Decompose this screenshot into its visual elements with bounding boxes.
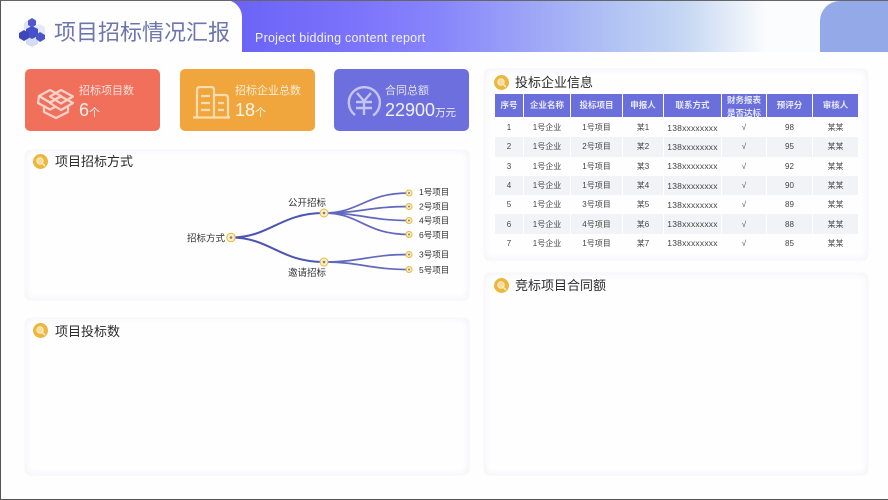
value: 22900万元 [385,100,456,120]
table: bidder information: 某某 [828,181,844,190]
table: bidder information: 138xxxxxxxx [667,200,718,210]
icon: yen coin [348,86,382,116]
heading: 项目招标方式 [55,154,133,169]
icon: buildings [193,86,230,119]
subtitle: Project bidding content report [255,31,426,45]
table: bidder information: √ [742,239,746,248]
table: bidder information: √ [742,220,746,229]
header right tab [820,1,888,52]
table: bidder information: 1号项目 [582,239,611,248]
table: bidder information: 1号项目 [582,123,611,132]
table: bidder information: 4 [507,181,511,190]
table: bidder information: 1号企业 [533,142,561,151]
stat card: projects [25,69,160,131]
table: bidder information: 某某 [828,200,844,209]
table: bidder information: √ [742,181,746,190]
table: bidder information: 某3 [637,162,649,171]
table: bidder information: 某某 [828,239,844,248]
mind map: bidding methods tree: 3号项目 [419,250,449,260]
mind map: bidding methods tree: 邀请招标 [288,267,327,279]
table: bidder information: 138xxxxxxxx [667,161,718,171]
table: bidder information: 1号项目 [582,181,611,190]
panel: bidding methods [25,150,469,300]
table: bidder information: 85 [785,239,794,248]
mind map: bidding methods tree: 招标方式 [187,232,226,244]
table: bidder information: 98 [785,123,794,132]
table: bidder information: 序号 [500,100,518,110]
table: bidder information: 1号企业 [533,181,561,190]
table: bidder information: 3 [507,162,511,171]
table: bidder information: 财务报表 [727,95,761,105]
table: bidder information: 1号企业 [533,239,561,248]
icon: magnifier [33,323,48,338]
table: bidder information: 138xxxxxxxx [667,238,718,248]
stat card: companies [180,69,315,131]
table: bidder information: 95 [785,142,794,151]
mind map: bidding methods tree: 6号项目 [419,230,449,240]
table: bidder information: 138xxxxxxxx [667,181,718,191]
table: bidder information: 4号项目 [582,220,611,229]
table: bidder information: 审核人 [823,100,848,110]
icon: cubes logo [19,18,45,47]
table: bidder information: 2号项目 [582,142,611,151]
mind map: bidding methods tree: 公开招标 [288,197,327,209]
title: 项目招标情况汇报 [54,20,230,45]
table: bidder information: 1号企业 [533,162,561,171]
table: bidder information: √ [742,123,746,132]
table: bidder information: 92 [785,162,794,171]
label: 招标项目数 [79,85,134,97]
table: bidder information: 6 [507,220,511,229]
table: bidder information: 某某 [828,142,844,151]
table: bidder information: 1号项目 [582,162,611,171]
table: bidder information: 预评分 [777,100,802,110]
mind map: bidding methods tree: 2号项目 [419,202,449,212]
table: bidder information: 5 [507,200,511,209]
header gradient band [227,1,827,52]
table: bidder information: 申报人 [630,100,656,110]
header white title tab [0,0,242,53]
table: bidder information: 某6 [637,220,649,229]
table: bidder information: √ [742,142,746,151]
mind map: bidding methods tree [187,187,449,279]
table: bidder information: √ [742,162,746,171]
table: bidder information: 某4 [637,181,649,190]
panel: contract amounts [484,273,868,475]
mind map: bidding methods tree: 1号项目 [419,187,449,197]
value: 6个 [79,100,100,120]
table: bidder information: 88 [785,220,794,229]
table: bidder information: 某5 [637,200,649,209]
table: bidder information [495,94,858,248]
table: bidder information: 某7 [637,239,649,248]
table: bidder information: 2 [507,142,511,151]
table: bidder information: 1号企业 [533,123,561,132]
panel: bidder information [484,69,868,260]
table: bidder information: 投标项目 [579,100,614,110]
table: bidder information: 某1 [637,123,649,132]
table: bidder information: 1号企业 [533,200,561,209]
table: bidder information: 3号项目 [582,200,611,209]
table: bidder information: 89 [785,200,794,209]
table: bidder information: 138xxxxxxxx [667,123,718,133]
table: bidder information: 7 [507,239,511,248]
table: bidder information: 90 [785,181,794,190]
stat card: contract total [334,69,469,131]
label: 招标企业总数 [235,85,301,97]
panel: bid counts [25,318,469,475]
table: bidder information: 1号企业 [533,220,561,229]
table: bidder information: 企业名称 [530,100,564,110]
icon: stacked boxes [37,88,74,119]
mind map: bidding methods tree: 4号项目 [419,216,449,226]
table: bidder information: 某2 [637,142,649,151]
heading: 项目投标数 [55,324,120,339]
table: bidder information: 某某 [828,123,844,132]
value: 18个 [235,100,266,120]
table: bidder information: 138xxxxxxxx [667,142,718,152]
table: bidder information: 联系方式 [675,100,710,110]
heading: 竞标项目合同额 [515,278,606,293]
icon: magnifier [494,75,509,90]
table: bidder information: 某某 [828,162,844,171]
table: bidder information: 某某 [828,220,844,229]
table: bidder information: 1 [507,123,511,132]
table: bidder information: √ [742,200,746,209]
table: bidder information: 138xxxxxxxx [667,219,718,229]
mind map: bidding methods tree: 5号项目 [419,265,449,275]
heading: 投标企业信息 [515,75,593,90]
icon: magnifier [33,154,48,169]
icon: magnifier [494,278,509,293]
label: 合同总额 [385,85,429,97]
